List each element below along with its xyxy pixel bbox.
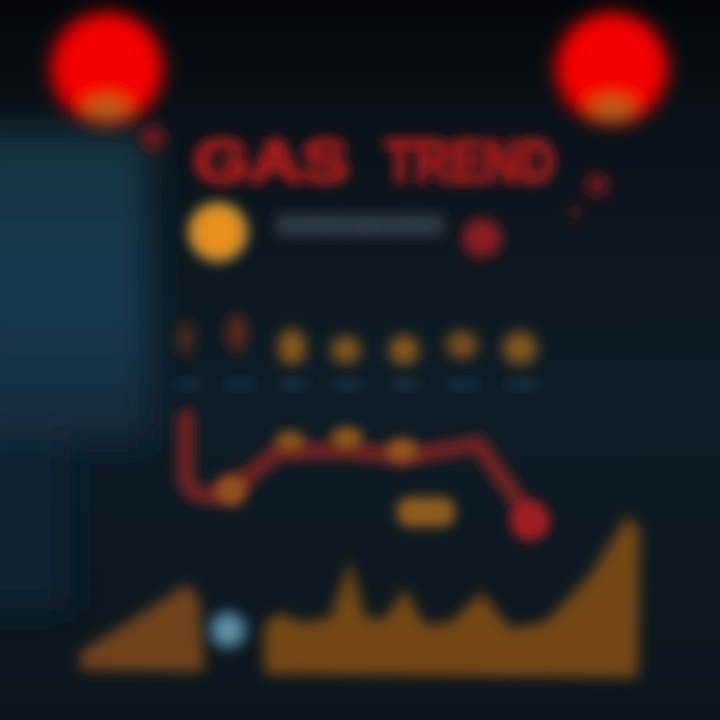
icon: blue dot bbox=[208, 610, 248, 650]
title: GAS bbox=[194, 128, 349, 195]
chart points bbox=[215, 427, 550, 541]
row of small axis labels bbox=[178, 379, 538, 389]
area chart bbox=[80, 515, 640, 678]
icon: right red lamp bbox=[556, 12, 668, 124]
title: TREND bbox=[385, 128, 555, 195]
decorative red sparks bbox=[140, 125, 609, 220]
title bbox=[194, 128, 555, 195]
row of weekly markers bbox=[177, 314, 537, 365]
callout bbox=[397, 497, 455, 527]
chart line bbox=[186, 418, 532, 520]
subtitle text: current gas price bbox=[278, 215, 440, 236]
icon: red status dot bbox=[462, 218, 502, 258]
panel: left blue column bbox=[0, 130, 150, 610]
line chart bbox=[186, 418, 550, 541]
icon: left red lamp bbox=[51, 12, 163, 124]
icon: orange status dot bbox=[187, 201, 249, 263]
